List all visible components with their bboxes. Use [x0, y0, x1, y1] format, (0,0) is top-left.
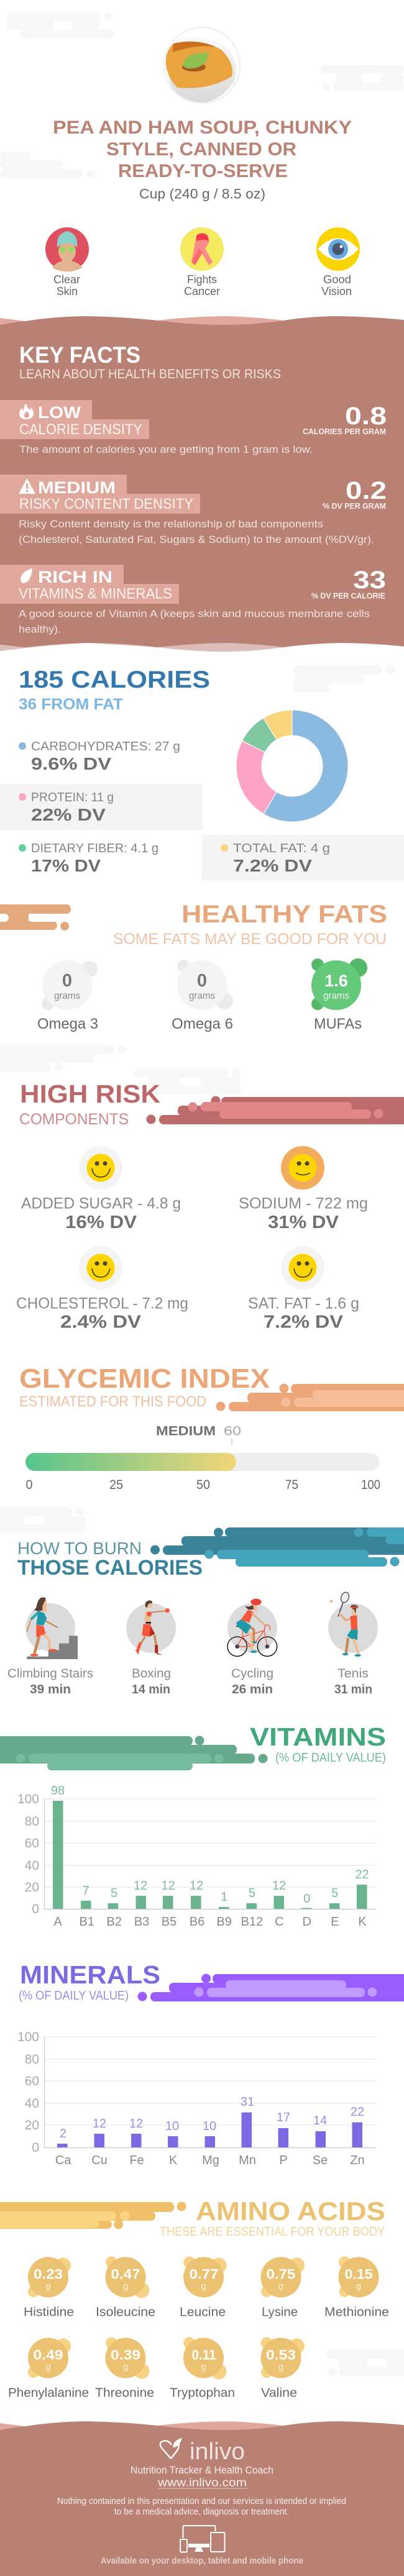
fact: rich in vitamins and minerals: 33 [353, 567, 386, 594]
bar chart: vitamins: 80 [25, 1814, 39, 1829]
heading band: vitamins: (% OF DAILY VALUE) [275, 1751, 386, 1765]
fact: low calorie density: LOW [38, 403, 81, 422]
donut chart: macronutrients [236, 710, 348, 822]
benefit: clear skin [45, 227, 89, 298]
footer text: disclaimer [57, 2496, 346, 2517]
chart: glycemic index gauge: 100 [361, 1478, 380, 1492]
bar chart: minerals [17, 2030, 376, 2167]
footer text: availability: Available on your desktop, tablet and mobile phone [101, 2556, 303, 2566]
fact: rich in vitamins and minerals [0, 565, 386, 635]
exercise: climbing stairs [7, 1597, 93, 1696]
heading band: healthy fats: HEALTHY FATS [181, 901, 387, 928]
heading: calories: 36 FROM FAT [19, 696, 123, 713]
fact: rich in vitamins and minerals: % DV PER CALORIE [311, 591, 385, 600]
fat: omega 6: Omega 6 [172, 1016, 233, 1032]
food image: soup bowl [164, 27, 240, 103]
bar chart: vitamins: 60 [25, 1836, 39, 1850]
amino acid: tryptophan: Tryptophan [170, 2387, 235, 2400]
bar chart: vitamins: A [53, 1915, 62, 1929]
exercise: tennis [328, 1591, 378, 1696]
fact: medium risky content density: (Cholesterol, Saturated Fat, Sugars & Sodium) to the amount (%DV/gr). [19, 534, 374, 545]
heading band: how to burn those calories [17, 1527, 404, 1580]
bar chart: minerals: 12 [129, 2117, 143, 2131]
exercise: cycling [227, 1599, 277, 1696]
heading band: glycemic index: GLYCEMIC INDEX [19, 1363, 270, 1394]
macro: protein: PROTEIN: 11 g [31, 791, 114, 804]
risk: cholesterol [16, 1246, 188, 1332]
bar chart: minerals: 31 [241, 2095, 254, 2109]
risk: added sugar: 16% DV [65, 1213, 137, 1232]
logo: inlivo [160, 2438, 245, 2465]
footer text: tagline and link: www.inlivo.com [157, 2477, 247, 2489]
risk: saturated fat: 7.2% DV [264, 1313, 344, 1332]
amino acid: methionine [324, 2256, 389, 2319]
amino acid: tryptophan: 0.11 [191, 2347, 216, 2363]
macro: total fat: TOTAL FAT: 4 g [233, 842, 330, 855]
amino acid: leucine [180, 2256, 226, 2319]
chart: glycemic index gauge: 0 [26, 1478, 32, 1492]
bar chart: minerals: 12 [93, 2117, 106, 2131]
exercise: climbing stairs: 39 min [30, 1683, 71, 1696]
bar chart: minerals: Cu [91, 2154, 108, 2167]
chart: glycemic index gauge: 25 [109, 1478, 123, 1492]
benefit: fights cancer: Cancer [184, 285, 220, 298]
heading band: vitamins: VITAMINS [250, 1723, 386, 1751]
bar chart: minerals: 17 [277, 2111, 290, 2124]
bar chart: vitamins [17, 1784, 376, 1929]
risk: added sugar: ADDED SUGAR - 4.8 g [21, 1195, 181, 1213]
benefit: fights cancer: Fights [187, 273, 217, 286]
bar chart: vitamins: 7 [82, 1884, 90, 1898]
macro: protein: 22% DV [31, 805, 106, 824]
exercise: boxing [126, 1600, 176, 1696]
fact: rich in vitamins and minerals: VITAMINS & MINERALS [19, 585, 172, 603]
amino acid: phenylalanine: 0.49 [34, 2347, 63, 2363]
risk: cholesterol: 2.4% DV [60, 1313, 142, 1332]
heading: key facts: KEY FACTS [19, 342, 140, 368]
bar chart: vitamins: 12 [272, 1879, 286, 1893]
amino acid: threonine: Threonine [95, 2387, 154, 2400]
macro: carbohydrates [19, 740, 180, 773]
risk: sodium: SODIUM - 722 mg [239, 1195, 368, 1213]
bar chart: vitamins: B6 [190, 1915, 204, 1929]
fact: low calorie density [0, 400, 387, 455]
bar chart: vitamins: 5 [249, 1886, 255, 1900]
amino acid: methionine: g [356, 2281, 361, 2292]
exercise: cycling: Cycling [231, 1667, 273, 1681]
amino acid: tryptophan [170, 2337, 235, 2400]
fact: low calorie density: CALORIE DENSITY [19, 421, 142, 438]
bar chart: vitamins: 12 [161, 1879, 175, 1893]
bar chart: minerals: 40 [25, 2096, 39, 2111]
bar chart: minerals: Fe [129, 2154, 144, 2167]
exercise: tennis: 31 min [334, 1683, 372, 1696]
benefit: clear skin: Clear [53, 273, 80, 286]
amino acid: isoleucine: 0.47 [111, 2267, 140, 2282]
bar chart: vitamins: 40 [25, 1859, 39, 1873]
panel: key facts [0, 316, 404, 652]
benefit: fights cancer [180, 227, 224, 298]
fat: mufas: grams [323, 991, 349, 1001]
fat: mufas [311, 958, 367, 1032]
fact: medium risky content density: % DV PER GRAM [323, 501, 386, 511]
amino acid: phenylalanine [8, 2338, 89, 2400]
amino acid: valine: Valine [261, 2387, 297, 2400]
amino acid: tryptophan: g [201, 2362, 206, 2372]
bar chart: vitamins: 98 [51, 1784, 65, 1798]
bar chart: minerals: 100 [17, 2030, 39, 2044]
bar chart: minerals: 20 [25, 2118, 39, 2132]
bar chart: vitamins: C [275, 1915, 284, 1929]
macro: dietary fiber: 17% DV [31, 856, 101, 875]
amino acid: isoleucine: Isoleucine [96, 2306, 155, 2319]
risk: added sugar [21, 1146, 181, 1232]
heading: calories: 185 CALORIES [19, 667, 210, 693]
background clouds: high risk [0, 1045, 241, 1095]
bar chart: minerals: 14 [313, 2114, 327, 2128]
icon: desktop, tablet and phone [180, 2526, 225, 2552]
benefit: good vision: Good [323, 273, 351, 286]
fact: rich in vitamins and minerals: healthy). [19, 624, 61, 635]
fact: low calorie density: CALORIES PER GRAM [303, 427, 386, 436]
amino acid: histidine: g [45, 2281, 51, 2292]
fat: mufas: 1.6 [324, 972, 348, 990]
bar chart: vitamins: 12 [134, 1879, 147, 1893]
background clouds: header [0, 12, 404, 178]
bar chart: minerals: 22 [351, 2105, 364, 2119]
exercise: tennis: Tenis [337, 1667, 369, 1681]
title [53, 117, 352, 181]
bar chart: minerals: 10 [203, 2119, 216, 2133]
amino acid: lysine: g [278, 2281, 283, 2292]
fat: omega 6 [172, 960, 233, 1032]
bar chart: minerals: Zn [350, 2154, 365, 2167]
amino acid: leucine: Leucine [180, 2306, 226, 2319]
serving size: Cup (240 g / 8.5 oz) [139, 186, 265, 201]
amino acid: lysine [261, 2257, 305, 2319]
heading band: healthy fats: SOME FATS MAY BE GOOD FOR YOU [113, 931, 387, 948]
footer panel [0, 2421, 404, 2576]
fat: omega 3: Omega 3 [37, 1016, 98, 1032]
chart: glycemic index gauge: 75 [285, 1478, 298, 1492]
fact: medium risky content density [0, 475, 387, 545]
amino acid: methionine: 0.15 [344, 2267, 373, 2282]
bar chart: vitamins: K [358, 1915, 367, 1929]
amino acid: valine [261, 2337, 305, 2400]
fat: omega 6: grams [189, 991, 215, 1001]
fact: low calorie density: 0.8 [345, 403, 387, 430]
bar chart: vitamins: B2 [106, 1915, 122, 1929]
amino acid: lysine: Lysine [262, 2306, 298, 2319]
bar chart: vitamins: 5 [111, 1886, 117, 1900]
heading: key facts [19, 342, 281, 381]
amino acid: valine: 0.53 [266, 2347, 296, 2363]
title: PEA AND HAM SOUP, CHUNKY [53, 117, 352, 138]
macro: total fat [221, 842, 330, 875]
chart: glycemic index gauge [25, 1424, 380, 1492]
macro: total fat: 7.2% DV [233, 856, 312, 875]
macro: carbohydrates: 9.6% DV [31, 754, 111, 773]
fat: omega 3: grams [54, 991, 80, 1001]
bar chart: vitamins: 22 [355, 1868, 369, 1882]
bar chart: vitamins: D [302, 1915, 311, 1929]
heading band: minerals: (% OF DAILY VALUE) [19, 1989, 129, 2003]
footer text: tagline and link [131, 2465, 273, 2489]
benefit: clear skin: Skin [57, 285, 78, 298]
fat: omega 6: 0 [197, 971, 207, 991]
background cloud: burn [0, 1508, 86, 1533]
bar chart: minerals: K [169, 2154, 178, 2167]
amino acid: isoleucine: g [123, 2281, 128, 2292]
bar chart: vitamins: 20 [25, 1880, 39, 1895]
amino acid: leucine: 0.77 [189, 2267, 219, 2282]
bar chart: vitamins: B5 [162, 1915, 177, 1929]
risk: sodium [239, 1146, 368, 1232]
heading band: high risk: COMPONENTS [19, 1111, 129, 1128]
bar chart: minerals: 80 [25, 2052, 39, 2067]
amino acid: threonine: g [123, 2362, 128, 2372]
exercise: cycling: 26 min [232, 1683, 273, 1696]
exercise: boxing: 14 min [132, 1683, 170, 1696]
amino acid: lysine: 0.75 [266, 2267, 296, 2282]
amino acid: methionine: Methionine [324, 2306, 389, 2319]
bar chart: vitamins: 0 [32, 1902, 39, 1916]
macro: carbohydrates: CARBOHYDRATES: 27 g [31, 740, 180, 753]
bar chart: vitamins: 0 [303, 1892, 310, 1906]
chart: glycemic index gauge: 60 [224, 1424, 241, 1439]
bar chart: minerals: 0 [32, 2141, 39, 2155]
bar chart: vitamins: 5 [331, 1886, 338, 1900]
heading: key facts: LEARN ABOUT HEALTH BENEFITS OR RISKS [19, 367, 281, 381]
footer text: disclaimer: Nothing contained in this presentation and our services is intended or implied [57, 2496, 346, 2506]
macro: protein [19, 791, 114, 824]
macro: dietary fiber: DIETARY FIBER: 4.1 g [31, 842, 158, 855]
bar chart: minerals: 10 [165, 2119, 179, 2133]
bar chart: vitamins: 100 [17, 1792, 39, 1806]
chart: glycemic index gauge: MEDIUM [156, 1424, 216, 1439]
benefit: good vision: Vision [321, 285, 352, 298]
bar chart: vitamins: B12 [241, 1915, 263, 1929]
bar chart: vitamins: E [331, 1915, 339, 1929]
bar chart: minerals: 2 [60, 2127, 67, 2141]
risk: cholesterol: CHOLESTEROL - 7.2 mg [16, 1295, 188, 1313]
fact: low calorie density: The amount of calories you are getting from 1 gram is low. [19, 444, 313, 455]
heading band: glycemic index: ESTIMATED FOR THIS FOOD [19, 1393, 206, 1410]
fat: omega 3 [37, 960, 98, 1032]
risk: saturated fat [248, 1246, 359, 1332]
bar chart: minerals: Se [313, 2154, 328, 2167]
risk: saturated fat: SAT. FAT - 1.6 g [248, 1295, 359, 1313]
heading band: how to burn those calories: HOW TO BURN [17, 1539, 142, 1558]
chart: glycemic index gauge: 50 [196, 1478, 210, 1492]
amino acid: threonine [95, 2337, 154, 2400]
heading band: amino acids: AMINO ACIDS [196, 2196, 385, 2226]
amino acid: histidine [24, 2257, 74, 2319]
heading band: vitamins [0, 1723, 386, 1770]
footer text: disclaimer: to be a medical advice, diagnosis or treatment. [114, 2507, 289, 2517]
bar chart: minerals: Mn [239, 2154, 256, 2167]
heading band: high risk [19, 1080, 404, 1128]
heading band: amino acids: THESE ARE ESSENTIAL FOR YOUR BODY [160, 2225, 385, 2239]
bar chart: vitamins: B3 [134, 1915, 149, 1929]
bar chart: vitamins: B1 [79, 1915, 94, 1929]
fact: medium risky content density: RISKY CONTENT DENSITY [19, 496, 193, 512]
exercise: boxing: Boxing [132, 1667, 171, 1681]
bar chart: minerals: P [279, 2154, 288, 2167]
bar chart: vitamins: 1 [221, 1890, 227, 1904]
title: READY-TO-SERVE [118, 161, 288, 181]
risk: sodium: 31% DV [268, 1213, 339, 1232]
heading band: minerals: MINERALS [20, 1960, 160, 1989]
amino acid: isoleucine [96, 2256, 155, 2319]
panel backgrounds: macro rows [0, 784, 404, 881]
footer text: tagline and link: Nutrition Tracker & Health Coach [131, 2465, 273, 2476]
heading band: minerals [19, 1960, 404, 2003]
heading band: how to burn those calories: THOSE CALORIES [17, 1556, 203, 1580]
heading band: high risk: HIGH RISK [20, 1080, 160, 1108]
fat: mufas: MUFAs [314, 1016, 362, 1032]
heading: calories [19, 667, 210, 713]
title: STYLE, CANNED OR [106, 139, 296, 160]
bar chart: vitamins: B9 [216, 1915, 232, 1929]
amino acid: histidine: Histidine [24, 2306, 74, 2319]
bar chart: minerals: Mg [202, 2154, 219, 2167]
background cloud: amino acids [326, 2350, 404, 2376]
amino acid: leucine: g [201, 2281, 206, 2292]
benefit: good vision [316, 227, 360, 298]
fact: rich in vitamins and minerals: RICH IN [38, 568, 112, 586]
heading band: glycemic index [19, 1363, 404, 1411]
amino acid: histidine: 0.23 [34, 2267, 63, 2282]
macro: dietary fiber [19, 842, 158, 875]
heading band: healthy fats [0, 901, 387, 948]
fat: omega 3: 0 [62, 971, 72, 991]
logo: inlivo: inlivo [190, 2439, 245, 2465]
amino acid: phenylalanine: Phenylalanine [8, 2387, 89, 2400]
fact: medium risky content density: 0.2 [346, 477, 387, 504]
amino acid: threonine: 0.39 [111, 2347, 140, 2363]
bar chart: minerals: Ca [55, 2154, 71, 2167]
heading band: amino acids [0, 2196, 385, 2239]
amino acid: valine: g [278, 2362, 283, 2372]
background cloud: calories [293, 665, 395, 693]
bar chart: minerals: 60 [25, 2074, 39, 2088]
exercise: climbing stairs: Climbing Stairs [7, 1667, 93, 1681]
fact: medium risky content density: Risky Content density is the relationship of bad components [19, 518, 323, 530]
fact: rich in vitamins and minerals: A good source of Vitamin A (keeps skin and mucous membrane cells [19, 608, 370, 620]
amino acid: phenylalanine: g [45, 2362, 51, 2372]
bar chart: vitamins: 12 [190, 1879, 203, 1893]
fact: medium risky content density: MEDIUM [38, 478, 116, 497]
